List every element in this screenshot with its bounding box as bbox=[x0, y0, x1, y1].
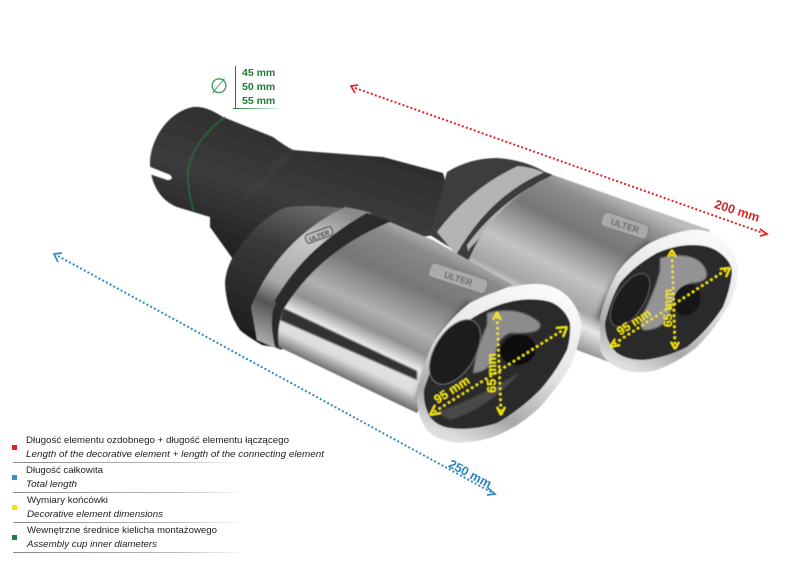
legend item: yellow bbox=[12, 495, 245, 523]
back tailpipe tip bbox=[430, 158, 738, 372]
front rim bbox=[417, 284, 581, 442]
legend item: red: Length of the decorative element + length of the connecting element bbox=[26, 449, 324, 460]
ring logo bbox=[304, 226, 334, 244]
legend item: red bbox=[12, 435, 324, 463]
front opening bbox=[424, 299, 570, 429]
back logo: ULTER bbox=[610, 217, 641, 235]
label: 250 mm: 250 mm bbox=[446, 457, 494, 491]
front tailpipe tip bbox=[225, 206, 581, 442]
front cup bbox=[225, 206, 367, 350]
front yellow dimensions: 65 mm bbox=[485, 353, 499, 393]
inlet diameter callout bbox=[210, 66, 285, 109]
front ring bbox=[251, 207, 372, 350]
front yellow dimensions bbox=[430, 312, 567, 415]
reflection band bbox=[280, 308, 417, 380]
front yellow dimensions: 95 mm bbox=[432, 373, 472, 407]
back opening bbox=[605, 245, 732, 360]
diameter values: 45 mm bbox=[242, 67, 275, 79]
green diameter marker bbox=[188, 117, 225, 211]
legend item: green: Wewnętrzne średnice kielicha montażowego bbox=[27, 525, 217, 536]
legend item: yellow: Decorative element dimensions bbox=[27, 509, 163, 520]
inlet diameter callout: 50 mm bbox=[242, 81, 275, 93]
back yellow dimensions: 65 mm bbox=[661, 289, 675, 327]
back rim bbox=[600, 230, 738, 372]
inlet diameter callout: 55 mm bbox=[242, 95, 275, 107]
back logo bbox=[600, 211, 650, 240]
legend item: blue: Total length bbox=[26, 479, 77, 490]
back ring bbox=[437, 166, 545, 262]
front dark band bbox=[272, 213, 392, 350]
label: 200 mm: 200 mm bbox=[713, 197, 761, 225]
front barrel bbox=[278, 222, 513, 413]
back cup bbox=[430, 158, 545, 260]
blue length arrow: 250 mm bbox=[54, 253, 495, 495]
back dark band bbox=[456, 172, 553, 262]
legend item: blue: Długość całkowita bbox=[26, 465, 104, 476]
ring logo: ULTER bbox=[308, 229, 331, 243]
legend item: green: Assembly cup inner diameters bbox=[26, 539, 157, 550]
red length arrow: 200 mm bbox=[351, 85, 767, 236]
back yellow dimensions: 95 mm bbox=[614, 306, 654, 338]
front logo top: ULTER bbox=[443, 269, 474, 288]
exhaust inlet pipe bbox=[150, 107, 460, 262]
diameter symbol: ∅ bbox=[210, 75, 228, 98]
pipe slot bbox=[150, 167, 172, 180]
front logo top bbox=[428, 262, 489, 295]
legend item: blue bbox=[12, 465, 245, 493]
back yellow dimensions bbox=[610, 250, 730, 349]
legend item: yellow: Wymiary końcówki bbox=[27, 495, 108, 506]
back barrel bbox=[468, 175, 710, 370]
legend item: green bbox=[12, 525, 245, 553]
legend item: red: Długość elementu ozdobnego + długość elementu łączącego bbox=[26, 435, 289, 446]
legend bbox=[12, 435, 324, 553]
